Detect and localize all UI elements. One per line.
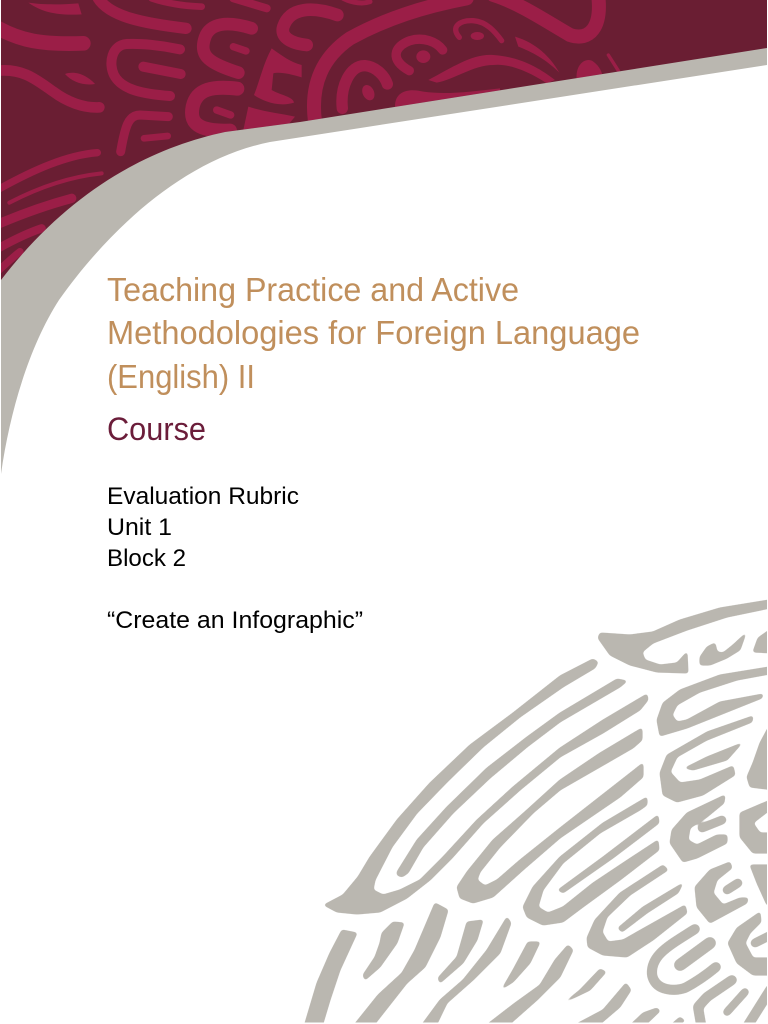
document details: Block 2 [107,545,186,572]
assignment name: “Create an Infographic” [107,607,363,634]
title: (English) II [107,358,255,395]
banner pattern: crimson glyph shapes, left part [0,0,618,271]
maroon banner background [1,0,767,282]
crest curls [700,633,746,665]
title: Methodologies for Foreign Language [107,314,640,351]
wing feather: second U [457,728,643,903]
title [107,271,640,395]
wing feather: outer U with tip [324,659,648,914]
document details: Evaluation Rubric [107,483,299,510]
wing feather: fifth U [652,929,716,990]
eagle head [598,599,768,673]
shoulder glyphs [657,666,768,736]
wing feather: third U [523,797,659,925]
grey curved band [1,48,767,474]
document details [107,483,299,572]
eagle emblem watermark [303,599,768,1024]
header: maroon patterned banner [0,0,767,282]
banner pattern: crimson glyph shapes, right part [283,0,618,122]
wing feather: inner finger [397,679,627,877]
wing feather: fourth U [587,865,687,957]
title: Teaching Practice and Active [107,271,519,308]
lower tail feathers [303,930,357,1024]
subtitle: Course: Course [107,411,206,447]
document details: Unit 1 [107,514,172,541]
